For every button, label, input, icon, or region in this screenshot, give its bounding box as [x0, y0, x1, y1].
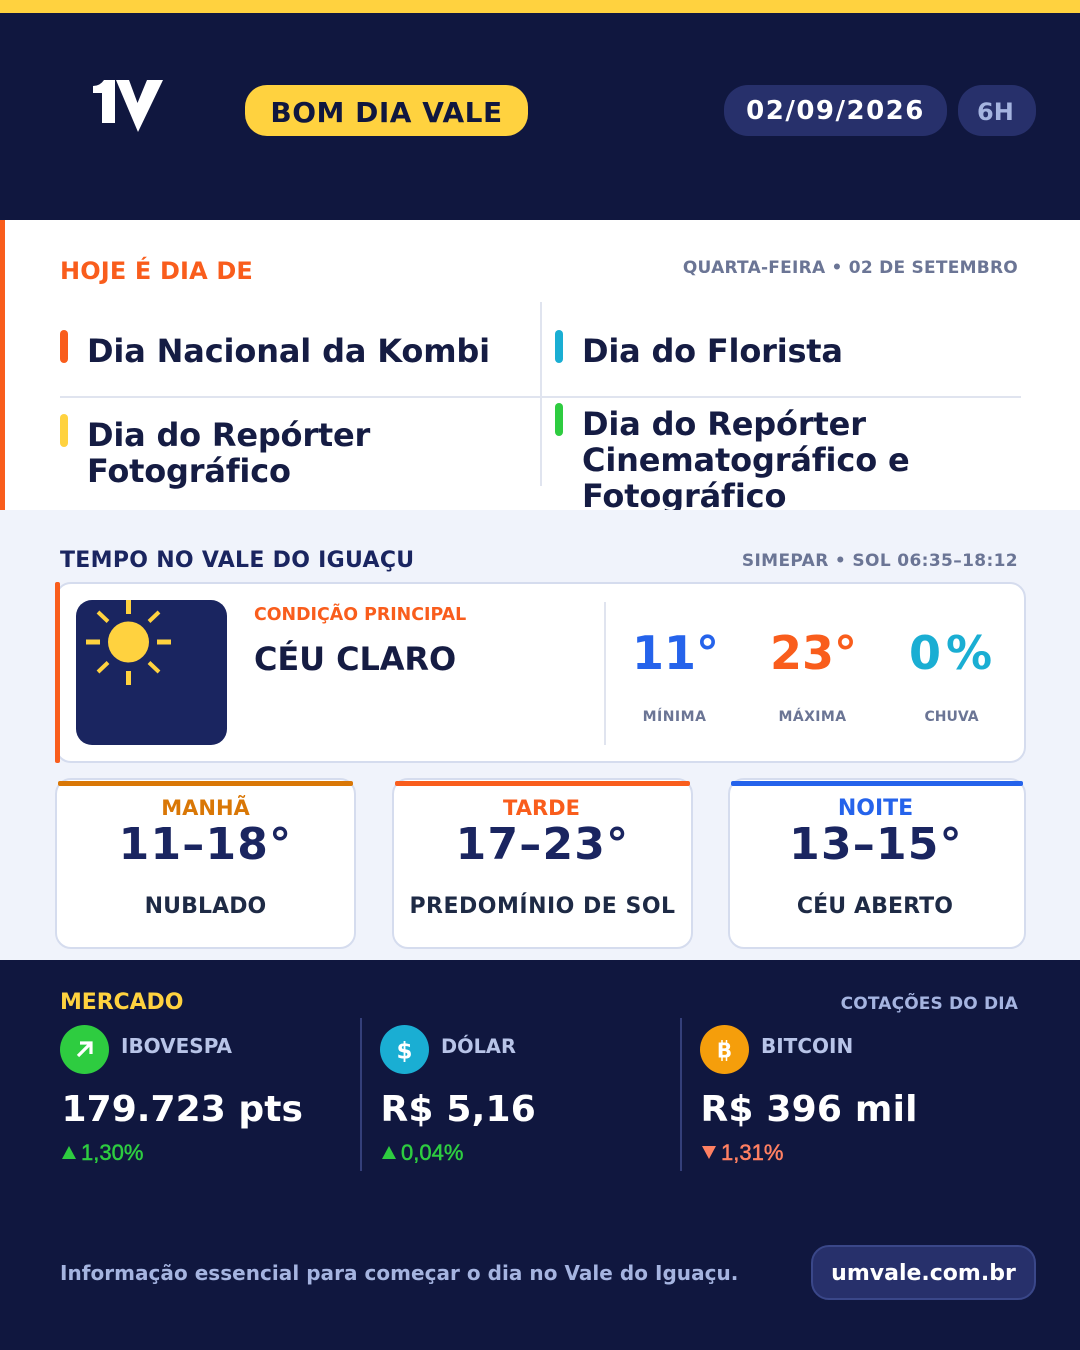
item text: Cinematográfico e [582, 441, 910, 479]
stat: chuva [909, 626, 997, 725]
period: TARDE [503, 796, 580, 820]
period: NOITE [838, 796, 913, 821]
marker yellow [60, 414, 68, 447]
change: 1,30% [81, 1140, 143, 1165]
logo: 1V [93, 80, 163, 132]
item text [582, 405, 910, 510]
edition pill: 6H [977, 98, 1014, 126]
icon: arrow up right [60, 1025, 109, 1074]
icon: dollar: $ [396, 1038, 413, 1064]
card accent stripe [55, 582, 60, 763]
edition pill [958, 85, 1036, 136]
panel: mercado [0, 960, 1080, 1350]
panel: hoje é dia de [0, 220, 1080, 510]
name: DÓLAR [441, 1035, 516, 1058]
description: CÉU ABERTO [797, 894, 953, 919]
current conditions card [55, 582, 1026, 763]
label: cotações do dia: COTAÇÕES DO DIA [841, 994, 1018, 1014]
top stripe [731, 781, 1023, 786]
card: tarde [392, 778, 693, 949]
name: IBOVESPA [121, 1034, 232, 1058]
change: 1,31% [721, 1140, 783, 1165]
value: R$ 396 mil [700, 1089, 918, 1130]
item text: Fotográfico [87, 452, 291, 490]
range: 17–23° [456, 819, 629, 870]
item: Dia do Repórter Fotográfico [60, 414, 370, 490]
label: CHUVA [924, 709, 979, 725]
value: 0% [909, 626, 997, 680]
top accent bar [0, 0, 1080, 13]
badge: Bom Dia Vale [245, 85, 528, 136]
date pill: 02/09/2026 [746, 96, 925, 126]
market: dólar [380, 1025, 536, 1165]
top stripe [58, 781, 353, 786]
panel: tempo [0, 510, 1080, 960]
footer url pill [811, 1245, 1036, 1300]
value: 11° [632, 626, 719, 680]
item text [87, 416, 370, 490]
description: NUBLADO [145, 894, 266, 919]
range: 13–15° [789, 819, 963, 870]
item text: Dia do Repórter [582, 405, 866, 443]
left accent stripe [0, 220, 5, 510]
footer tagline: Informação essencial para começar o dia no Vale do Iguaçu. [60, 1261, 738, 1285]
heading: mercado: MERCADO [60, 990, 183, 1015]
heading: tempo no vale do iguaçu: TEMPO NO VALE DO IGUAÇU [60, 548, 414, 573]
stat: mínima [632, 626, 719, 725]
heading: hoje é dia de: HOJE É DIA DE [60, 257, 253, 285]
date text: QUARTA-FEIRA • 02 DE SETEMBRO [683, 258, 1018, 278]
label: MÍNIMA [643, 709, 706, 725]
footer url pill: umvale.com.br [831, 1261, 1016, 1286]
badge: Bom Dia Vale: BOM DIA VALE [270, 96, 503, 129]
label: MÁXIMA [779, 709, 846, 725]
icon: sun [76, 600, 227, 745]
top stripe [395, 781, 690, 786]
description: PREDOMÍNIO DE SOL [409, 894, 676, 919]
item text: Dia Nacional da Kombi [87, 332, 490, 370]
value: 179.723 pts [62, 1089, 303, 1130]
value: R$ 5,16 [380, 1089, 536, 1130]
card: noite [728, 778, 1026, 949]
period: MANHÃ [161, 796, 250, 820]
item: Dia Nacional da Kombi [60, 330, 490, 370]
item: Dia do Repórter Cinematográfico e Fotográfico [555, 403, 910, 510]
marker cyan [555, 330, 563, 363]
card: manhã [55, 778, 356, 949]
marker orange [60, 330, 68, 363]
range: 11–18° [119, 819, 292, 870]
header panel [0, 13, 1080, 220]
market: bitcoin [700, 1025, 918, 1165]
date pill [724, 85, 947, 136]
source text: SIMEPAR • SOL 06:35–18:12 [742, 551, 1018, 571]
market: ibovespa [60, 1025, 303, 1165]
marker green [555, 403, 563, 436]
name: BITCOIN [761, 1034, 853, 1058]
value: 23° [770, 626, 857, 680]
stat: máxima [770, 626, 857, 725]
icon: dollar [380, 1025, 429, 1074]
label: condição principal: CONDIÇÃO PRINCIPAL [254, 605, 466, 625]
icon: bitcoin [700, 1025, 749, 1074]
item: Dia do Florista [555, 330, 843, 370]
item text: Dia do Florista [582, 332, 843, 370]
item text: Dia do Repórter [87, 416, 370, 454]
icon: bitcoin: B [717, 1038, 732, 1062]
condition text: CÉU CLARO [254, 640, 456, 678]
change: 0,04% [401, 1140, 463, 1165]
